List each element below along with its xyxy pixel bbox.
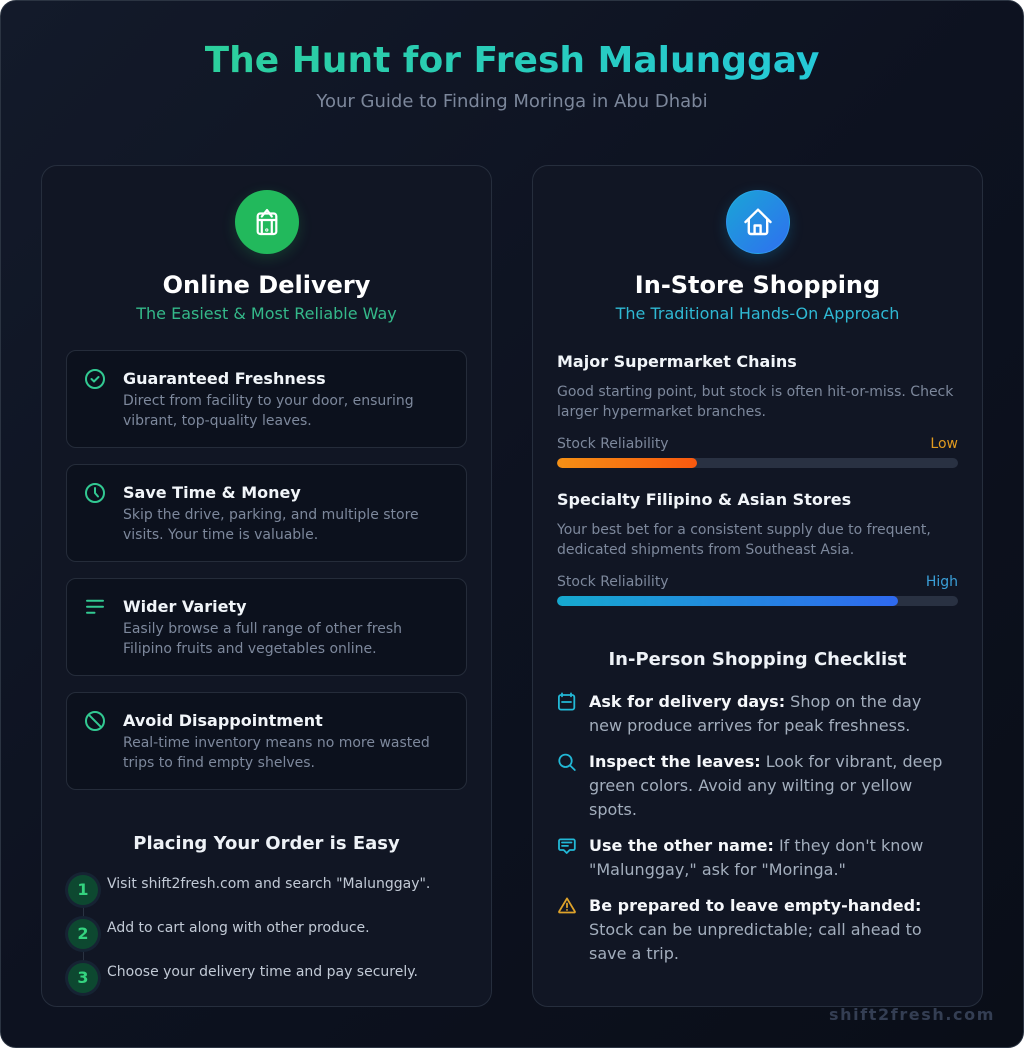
card title: guaranteed freshness: Guaranteed Freshness	[123, 369, 326, 388]
checklist item: inspect leaves	[589, 752, 942, 819]
checklist item: be prepared	[589, 896, 922, 963]
card text: save time and money: visits. Your time is valuable.	[123, 527, 318, 543]
card text: wider variety	[123, 621, 402, 657]
value: low: Low	[930, 436, 958, 452]
checklist item: inspect leaves: Inspect the leaves: Look for vibrant, deep	[589, 752, 942, 771]
label: stock reliability low: Stock Reliability	[557, 436, 669, 452]
checklist item: be prepared: save a trip.	[589, 944, 679, 963]
text: major supermarket chains	[557, 384, 954, 420]
text: major supermarket chains: larger hypermarket branches.	[557, 404, 766, 420]
watermark: shift2fresh.com	[829, 1005, 995, 1024]
icon: delivery app	[235, 190, 299, 254]
tagline: in-store shopping: The Traditional Hands-On Approach	[616, 304, 899, 323]
card text: avoid disappointment	[123, 735, 430, 771]
card text: save time and money: Skip the drive, parking, and multiple store	[123, 507, 419, 523]
card: guaranteed freshness	[66, 350, 467, 448]
text: specialty stores: Your best bet for a consistent supply due to frequent,	[557, 522, 931, 538]
icon: magnifier	[558, 754, 576, 771]
checklist item: other name: "Malunggay," ask for "Moringa."	[589, 860, 846, 879]
card text: wider variety: Easily browse a full range of other fresh	[123, 621, 402, 637]
panel: online delivery	[41, 165, 492, 1007]
checklist item: other name	[589, 836, 923, 879]
icon: warning triangle	[558, 898, 576, 914]
step connector 1	[83, 906, 84, 918]
card title: wider variety: Wider Variety	[123, 597, 247, 616]
card text: avoid disappointment: trips to find empty shelves.	[123, 755, 315, 771]
card text: guaranteed freshness	[123, 393, 414, 429]
step 2 number	[68, 919, 98, 949]
card text: wider variety: Filipino fruits and vegetables online.	[123, 641, 377, 657]
step 2 text: Add to cart along with other produce.	[107, 920, 370, 936]
text: specialty stores: dedicated shipments from Southeast Asia.	[557, 542, 854, 558]
checklist item: other name: Use the other name: If they don't know	[589, 836, 923, 855]
checklist item: delivery days: Ask for delivery days: Shop on the day	[589, 692, 921, 711]
checklist item: delivery days	[589, 692, 921, 735]
icon: calendar	[558, 692, 576, 710]
card: avoid disappointment	[66, 692, 467, 790]
text: specialty stores	[557, 522, 931, 558]
heading: checklist: In-Person Shopping Checklist	[608, 649, 906, 670]
heading: placing your order: Placing Your Order is Easy	[133, 833, 400, 854]
icon: speech bubble	[558, 838, 576, 854]
step 1 number: 1	[77, 880, 89, 899]
step 2 number: 2	[77, 924, 89, 943]
card text: save time and money	[123, 507, 419, 543]
step 3 number	[68, 963, 98, 993]
heading: specialty stores: Specialty Filipino & Asian Stores	[557, 490, 851, 509]
card title: save time and money: Save Time & Money	[123, 483, 301, 502]
value: high: High	[926, 574, 958, 590]
card title: avoid disappointment: Avoid Disappointment	[123, 711, 323, 730]
bar: low reliability	[557, 458, 958, 468]
checklist item: be prepared: Stock can be unpredictable; call ahead to	[589, 920, 922, 939]
card text: avoid disappointment: Real-time inventory means no more wasted	[123, 735, 430, 751]
icon: list lines	[86, 600, 104, 614]
step connector 2	[83, 950, 84, 962]
card: save time and money	[66, 464, 467, 562]
panel: in-store shopping	[532, 165, 983, 1007]
step 3 number: 3	[77, 968, 89, 987]
checklist item: inspect leaves: spots.	[589, 800, 637, 819]
step 1 number	[68, 875, 98, 905]
card text: guaranteed freshness: vibrant, top-quality leaves.	[123, 413, 312, 429]
step 1 text: Visit shift2fresh.com and search "Malunggay".	[107, 876, 430, 892]
subtitle: Your Guide to Finding Moringa in Abu Dhabi	[316, 91, 708, 112]
checklist item: be prepared: Be prepared to leave empty-handed:	[589, 896, 921, 915]
heading: in-store shopping: In-Store Shopping	[635, 271, 880, 299]
checklist item: inspect leaves: green colors. Avoid any wilting or yellow	[589, 776, 912, 795]
card text: guaranteed freshness: Direct from facility to your door, ensuring	[123, 393, 414, 409]
icon: clock	[85, 483, 105, 503]
bar: high reliability	[557, 596, 958, 606]
tagline: online delivery: The Easiest & Most Reliable Way	[136, 304, 397, 323]
heading: online delivery: Online Delivery	[163, 271, 370, 299]
card: wider variety	[66, 578, 467, 676]
heading: major supermarket chains: Major Supermarket Chains	[557, 352, 797, 371]
step 3 text: Choose your delivery time and pay securely.	[107, 964, 418, 980]
title: The Hunt for Fresh Malunggay	[205, 40, 819, 81]
checklist item: delivery days: new produce arrives for peak freshness.	[589, 716, 910, 735]
text: major supermarket chains: Good starting point, but stock is often hit-or-miss. Check	[557, 384, 953, 400]
icon: check circle	[85, 369, 105, 389]
icon: prohibited circle	[85, 711, 105, 731]
icon: house	[726, 190, 790, 254]
label: stock reliability high: Stock Reliability	[557, 574, 669, 590]
